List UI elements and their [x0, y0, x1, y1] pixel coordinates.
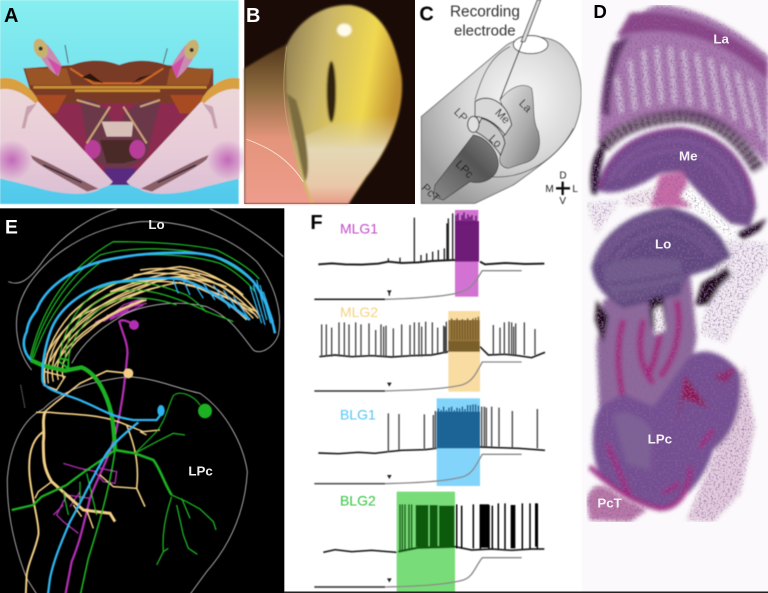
- LP neuropil: [468, 116, 479, 132]
- label LPc: LPc: [188, 464, 213, 479]
- letter F: F: [310, 212, 323, 234]
- La lamina: [598, 5, 768, 167]
- left eye stalk: [31, 37, 62, 76]
- label Lo: Lo: [148, 217, 165, 232]
- panel E: neuron reconstructions: [0, 208, 284, 593]
- neuron MLG1 magenta: [53, 298, 147, 593]
- Me medulla: [597, 127, 756, 227]
- neuropil outlines: [7, 209, 283, 593]
- trace group MLG1: [314, 210, 544, 299]
- right claw: [127, 78, 248, 194]
- trace group BLG2: [314, 492, 544, 593]
- right eye stalk: [172, 38, 201, 78]
- neuron BLG1 blue: [24, 253, 275, 593]
- LPc lobe: [593, 352, 741, 507]
- orientation compass: D: [559, 171, 567, 182]
- label La: La: [516, 98, 534, 116]
- panel C: brain schematic: [419, 0, 581, 207]
- dark pigment band: [603, 116, 758, 170]
- letter E: E: [5, 218, 18, 239]
- label BLG1: BLG1: [340, 407, 376, 423]
- head outline: [421, 37, 581, 203]
- label electrode: electrode: [454, 22, 516, 39]
- label LP: LP: [451, 106, 469, 125]
- label Me: Me: [492, 107, 512, 127]
- letter A: A: [4, 5, 18, 27]
- stimulus BLG1: [314, 454, 522, 484]
- chiasm: [650, 172, 693, 207]
- orientation compass: [545, 171, 578, 207]
- neuron MLG2 yellow: [26, 267, 260, 593]
- tract region: [597, 273, 697, 420]
- trace group BLG1: [314, 398, 545, 486]
- scattered tissue: [587, 200, 768, 343]
- Me neuropil: [475, 98, 512, 135]
- label PcT: PcT: [419, 182, 442, 205]
- panel B: embryo photograph: [244, 0, 415, 204]
- left claw: [0, 78, 113, 194]
- stimulus MLG1: [314, 271, 522, 299]
- orientation compass: L: [572, 184, 578, 195]
- LPc neuropil and tract: [433, 135, 498, 200]
- label Me: Me: [679, 148, 698, 163]
- label MLG1: MLG1: [340, 221, 378, 237]
- recording electrode: [500, 0, 541, 100]
- label Lo: Lo: [486, 133, 504, 150]
- panel F lower traces: [314, 398, 545, 593]
- trace group MLG2: [314, 304, 545, 392]
- optic lobe outline: [475, 47, 573, 177]
- letter D: D: [593, 1, 607, 22]
- orientation compass: M: [545, 184, 554, 195]
- letter B: B: [246, 5, 260, 27]
- pigment clusters: [595, 267, 732, 343]
- label LPc: LPc: [648, 431, 673, 446]
- label Recording: Recording: [450, 4, 520, 21]
- stimulus BLG2: [314, 558, 522, 587]
- label BLG2: BLG2: [340, 493, 376, 509]
- cuticle window: [513, 36, 548, 54]
- label MLG2: MLG2: [340, 304, 378, 320]
- label La: La: [713, 31, 729, 46]
- La neuropil: [500, 85, 540, 168]
- label PcT: PcT: [597, 495, 622, 510]
- neuron BLG2 green: [12, 242, 259, 593]
- orientation compass: V: [559, 196, 566, 207]
- Lo lobula: [592, 207, 732, 308]
- panel A: crab photograph: [0, 0, 248, 204]
- stimulus MLG2: [314, 362, 522, 391]
- Lo neuropil: [475, 118, 505, 155]
- label LPc: LPc: [453, 159, 475, 181]
- label Lo: Lo: [655, 236, 671, 251]
- panel F: electrophysiology traces: [310, 210, 545, 392]
- letter C: C: [419, 4, 434, 26]
- panel D: histological section: [582, 0, 768, 592]
